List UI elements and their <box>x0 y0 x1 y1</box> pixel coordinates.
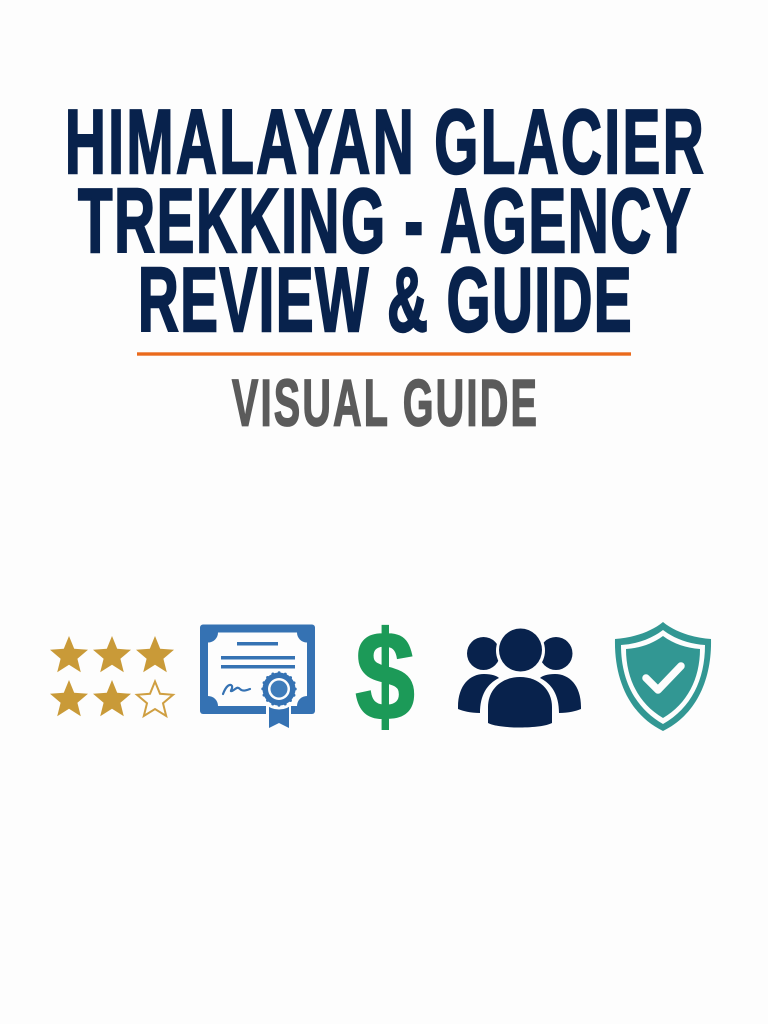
title: REVIEW & GUIDE <box>138 249 632 351</box>
title <box>65 91 704 351</box>
icon: shield with check <box>615 622 711 731</box>
subtitle: VISUAL GUIDE <box>232 367 537 440</box>
title: TREKKING - AGENCY <box>78 170 691 272</box>
title: HIMALAYAN GLACIER <box>65 91 704 193</box>
icon: certificate <box>200 624 315 728</box>
icon: star rating <box>50 636 174 716</box>
title underline <box>137 352 631 356</box>
icon: group of people <box>458 626 581 728</box>
icon: dollar sign: $ <box>355 605 415 746</box>
